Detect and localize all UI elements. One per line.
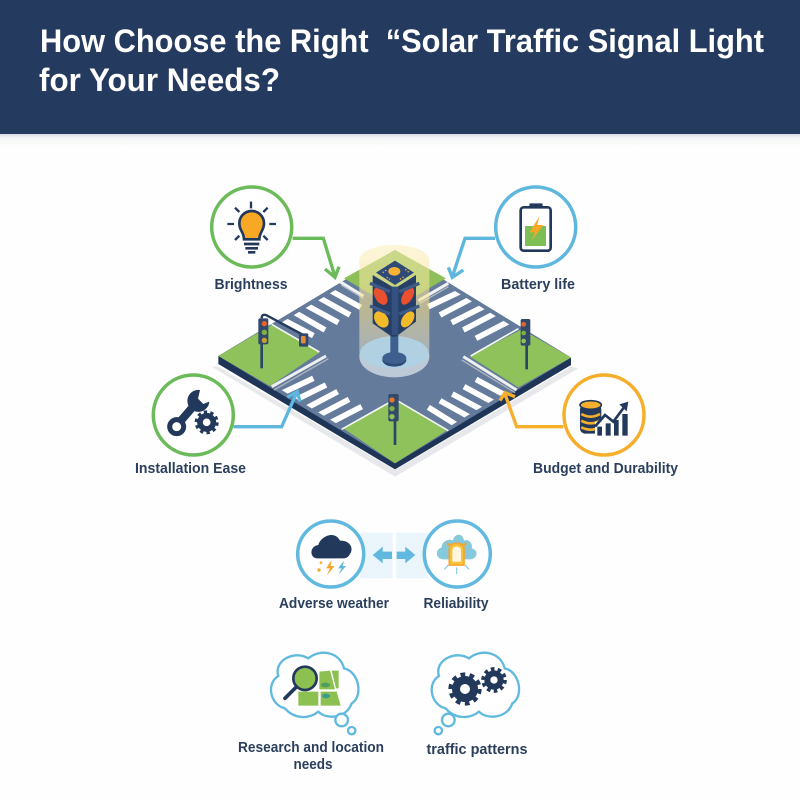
budget circle: [564, 375, 644, 455]
crosswalks: [282, 291, 508, 425]
title: for Your Needs?: [39, 62, 280, 98]
arrow: installation ease: [233, 392, 300, 427]
platform shadow: [212, 367, 578, 477]
signal head: [370, 261, 419, 337]
weather circle: [298, 521, 364, 587]
item: traffic patterns: [426, 653, 528, 758]
item: brightness: [212, 187, 292, 293]
label: traffic patterns: [426, 741, 528, 758]
label: Brightness: [214, 276, 288, 293]
item: reliability: [424, 521, 490, 612]
green corner: right: [470, 329, 571, 387]
light beam: [359, 245, 429, 377]
thought cloud: [432, 653, 519, 734]
label: needs: [294, 756, 332, 773]
comparison arrows: [360, 533, 428, 578]
curbs: [272, 282, 518, 431]
central solar traffic light: [359, 245, 429, 377]
green corner: top: [344, 250, 446, 308]
arrow: budget and durability: [500, 393, 563, 427]
icon: light bulb: [227, 202, 276, 252]
item: adverse weather: [279, 521, 389, 612]
item: budget and durability: [533, 375, 679, 477]
icon: coins and growth chart: [580, 401, 628, 438]
small traffic light: left: [258, 315, 308, 368]
label: Reliability: [424, 595, 489, 612]
icon: beacon and cloud: [437, 535, 477, 574]
title: [39, 23, 764, 98]
item: research and location needs: [238, 653, 384, 773]
icon: storm cloud: [311, 535, 352, 576]
small traffic light: right: [521, 319, 530, 369]
brightness circle: [212, 187, 292, 267]
item: installation ease: [135, 375, 246, 477]
isometric intersection: [212, 250, 578, 477]
icon: wrench and gear: [170, 390, 217, 434]
light pool: [359, 336, 429, 377]
green corner: left: [218, 325, 319, 386]
battery circle: [496, 187, 576, 267]
icon: magnifier and map: [285, 667, 341, 706]
label: Adverse weather: [279, 595, 389, 612]
installation circle: [153, 375, 233, 455]
arrow: battery life: [448, 238, 495, 277]
label: [238, 739, 384, 773]
reliability circle: [424, 521, 490, 587]
small traffic light: bottom: [388, 394, 399, 445]
road surface: [218, 250, 571, 463]
green corner: bottom: [343, 400, 447, 463]
label: Budget and Durability: [533, 460, 679, 477]
icon: battery: [521, 203, 551, 251]
header banner: [0, 0, 800, 146]
platform base: [218, 250, 571, 469]
label: Research and location: [238, 739, 384, 756]
item: battery life: [496, 187, 576, 293]
label: Battery life: [501, 276, 575, 293]
label: Installation Ease: [135, 460, 246, 477]
pole: [382, 330, 406, 367]
thought cloud: [271, 653, 358, 734]
icon: gears: [451, 669, 505, 703]
title: How Choose the Right “Solar Traffic Signal Light: [40, 23, 764, 59]
arrow: brightness: [293, 238, 339, 277]
